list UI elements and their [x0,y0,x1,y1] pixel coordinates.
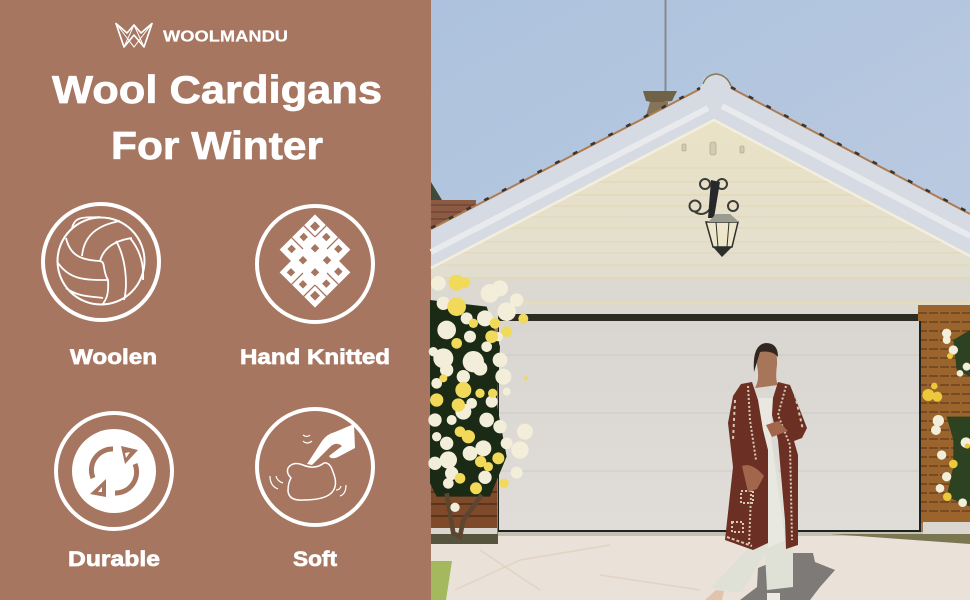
head and neck [755,344,778,388]
label: Soft: Soft [293,547,337,571]
logo: Woolmandu [116,24,288,47]
icon: endless knot (hand knitted) [257,206,373,322]
title [52,69,382,168]
background roof [431,182,476,230]
brick wall right [918,305,970,534]
feet [705,590,724,600]
icon: hand pressing soft blob (soft) [257,409,373,525]
shadow of woman [740,553,835,600]
vents [682,142,744,155]
wall lower [431,279,970,319]
flowering bush right [922,329,970,507]
icon: recycle arrows (durable) [56,413,172,529]
hands [742,465,764,492]
trousers [712,430,793,592]
gable wall [431,120,970,320]
label: Woolen: Woolen [70,345,157,369]
antenna and chimney vent [643,0,677,119]
flowering bush left [428,275,533,537]
woman [705,343,807,600]
cardigan pattern [727,386,803,546]
logo: Woolmandu: WOOLMANDU [163,28,288,46]
white top and trousers upper [758,398,785,548]
lantern [690,179,739,257]
title: For Winter [111,125,323,168]
icon: volleyball (woolen) [43,204,159,320]
title: Wool Cardigans [52,69,382,112]
label: Durable: Durable [68,547,160,571]
sky [431,0,970,300]
photo: woman in cardigan before garage [428,0,970,600]
driveway [431,532,970,600]
garage door [498,321,921,532]
left brick and base [431,480,497,544]
label: Hand Knitted: Hand Knitted [240,345,390,369]
garage header [498,314,918,321]
wall plank lines [431,168,970,265]
panel: brown sidebar [0,0,431,600]
roof fascia [431,74,970,268]
cardigan [725,382,807,550]
